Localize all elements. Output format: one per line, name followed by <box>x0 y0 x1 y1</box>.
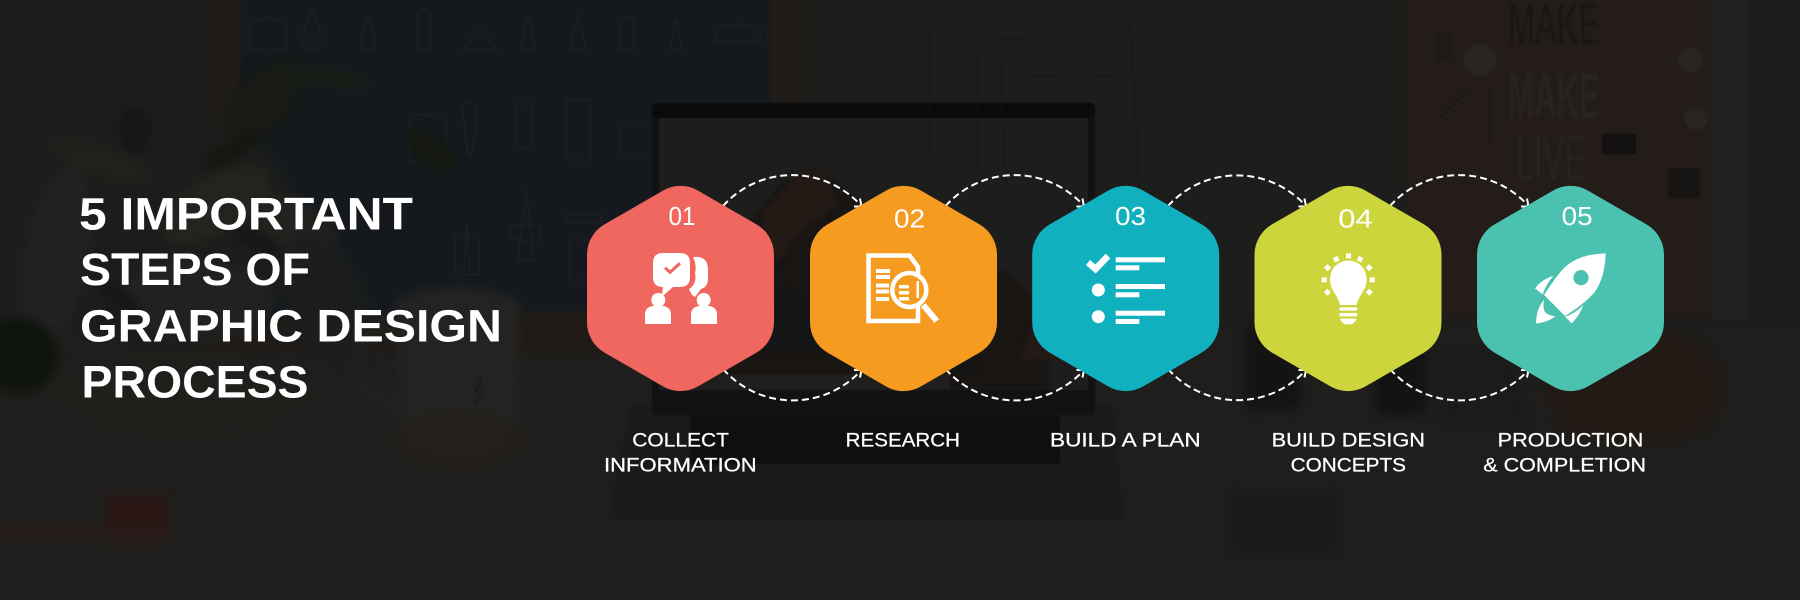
title <box>79 188 502 408</box>
label: build design concepts: BUILD DESIGN <box>1272 430 1425 452</box>
label: collect information: COLLECT <box>632 430 729 452</box>
title: 5 IMPORTANT <box>79 188 413 240</box>
label: collect information: INFORMATION <box>604 455 757 477</box>
background: desk objects <box>0 325 1720 550</box>
step 1: collect information <box>587 186 774 477</box>
background: poster MAKE MAKE LIVE <box>1436 0 1708 198</box>
background: poster MAKE MAKE LIVE: LIVE <box>1516 122 1586 194</box>
hexagon 04 <box>1254 186 1442 391</box>
label: build design concepts <box>1272 430 1425 477</box>
icon: document with magnifier <box>868 256 937 321</box>
label: collect information <box>604 430 757 477</box>
icon: rocket <box>1535 253 1606 324</box>
hexagon 01 <box>587 186 774 391</box>
step 5: production and completion <box>1477 186 1664 477</box>
background: wall sketches <box>930 20 1170 220</box>
arrow: step 2 to 3 top <box>946 175 1084 206</box>
label: production and completion <box>1483 430 1646 477</box>
step 4: build design concepts <box>1254 186 1442 477</box>
number 04: 04 <box>1338 203 1373 233</box>
arrow: step 1 to 2 top <box>723 175 862 206</box>
arrows between steps <box>723 175 1528 400</box>
background: laptop <box>610 103 1122 520</box>
background: poster MAKE MAKE LIVE: MAKE <box>1508 60 1600 132</box>
icon: two people talking <box>645 253 717 324</box>
hexagon 05 <box>1477 186 1664 391</box>
label: production and completion: & COMPLETION <box>1483 455 1646 477</box>
arrow: step 4 to 5 bottom <box>1390 369 1528 400</box>
label: production and completion: PRODUCTION <box>1498 430 1643 452</box>
icon: checklist <box>1088 256 1165 324</box>
number 03: 03 <box>1115 201 1146 231</box>
title: STEPS OF <box>80 244 310 295</box>
arrow: step 1 to 2 bottom <box>723 369 862 400</box>
arrow: step 4 to 5 top <box>1390 175 1528 206</box>
arrow: step 3 to 4 top <box>1168 175 1306 206</box>
arrow: step 2 to 3 bottom <box>946 369 1084 400</box>
background: mug <box>357 287 520 468</box>
arrow: step 3 to 4 bottom <box>1168 369 1306 400</box>
icon: light bulb <box>1322 253 1375 324</box>
background: plant <box>0 42 464 435</box>
title: PROCESS <box>82 356 308 408</box>
hexagon 03 <box>1032 186 1219 391</box>
number 01: 01 <box>668 201 696 231</box>
number 05: 05 <box>1562 201 1593 231</box>
label: research: RESEARCH <box>846 430 960 452</box>
title: GRAPHIC DESIGN <box>80 300 502 352</box>
label: build design concepts: CONCEPTS <box>1291 455 1406 477</box>
hexagon 02 <box>810 186 997 391</box>
number 02: 02 <box>894 203 925 233</box>
arrowheads <box>854 198 1528 378</box>
step 3: build a plan <box>1032 186 1219 452</box>
label: build a plan: BUILD A PLAN <box>1050 430 1201 452</box>
step 2: research <box>810 186 997 452</box>
